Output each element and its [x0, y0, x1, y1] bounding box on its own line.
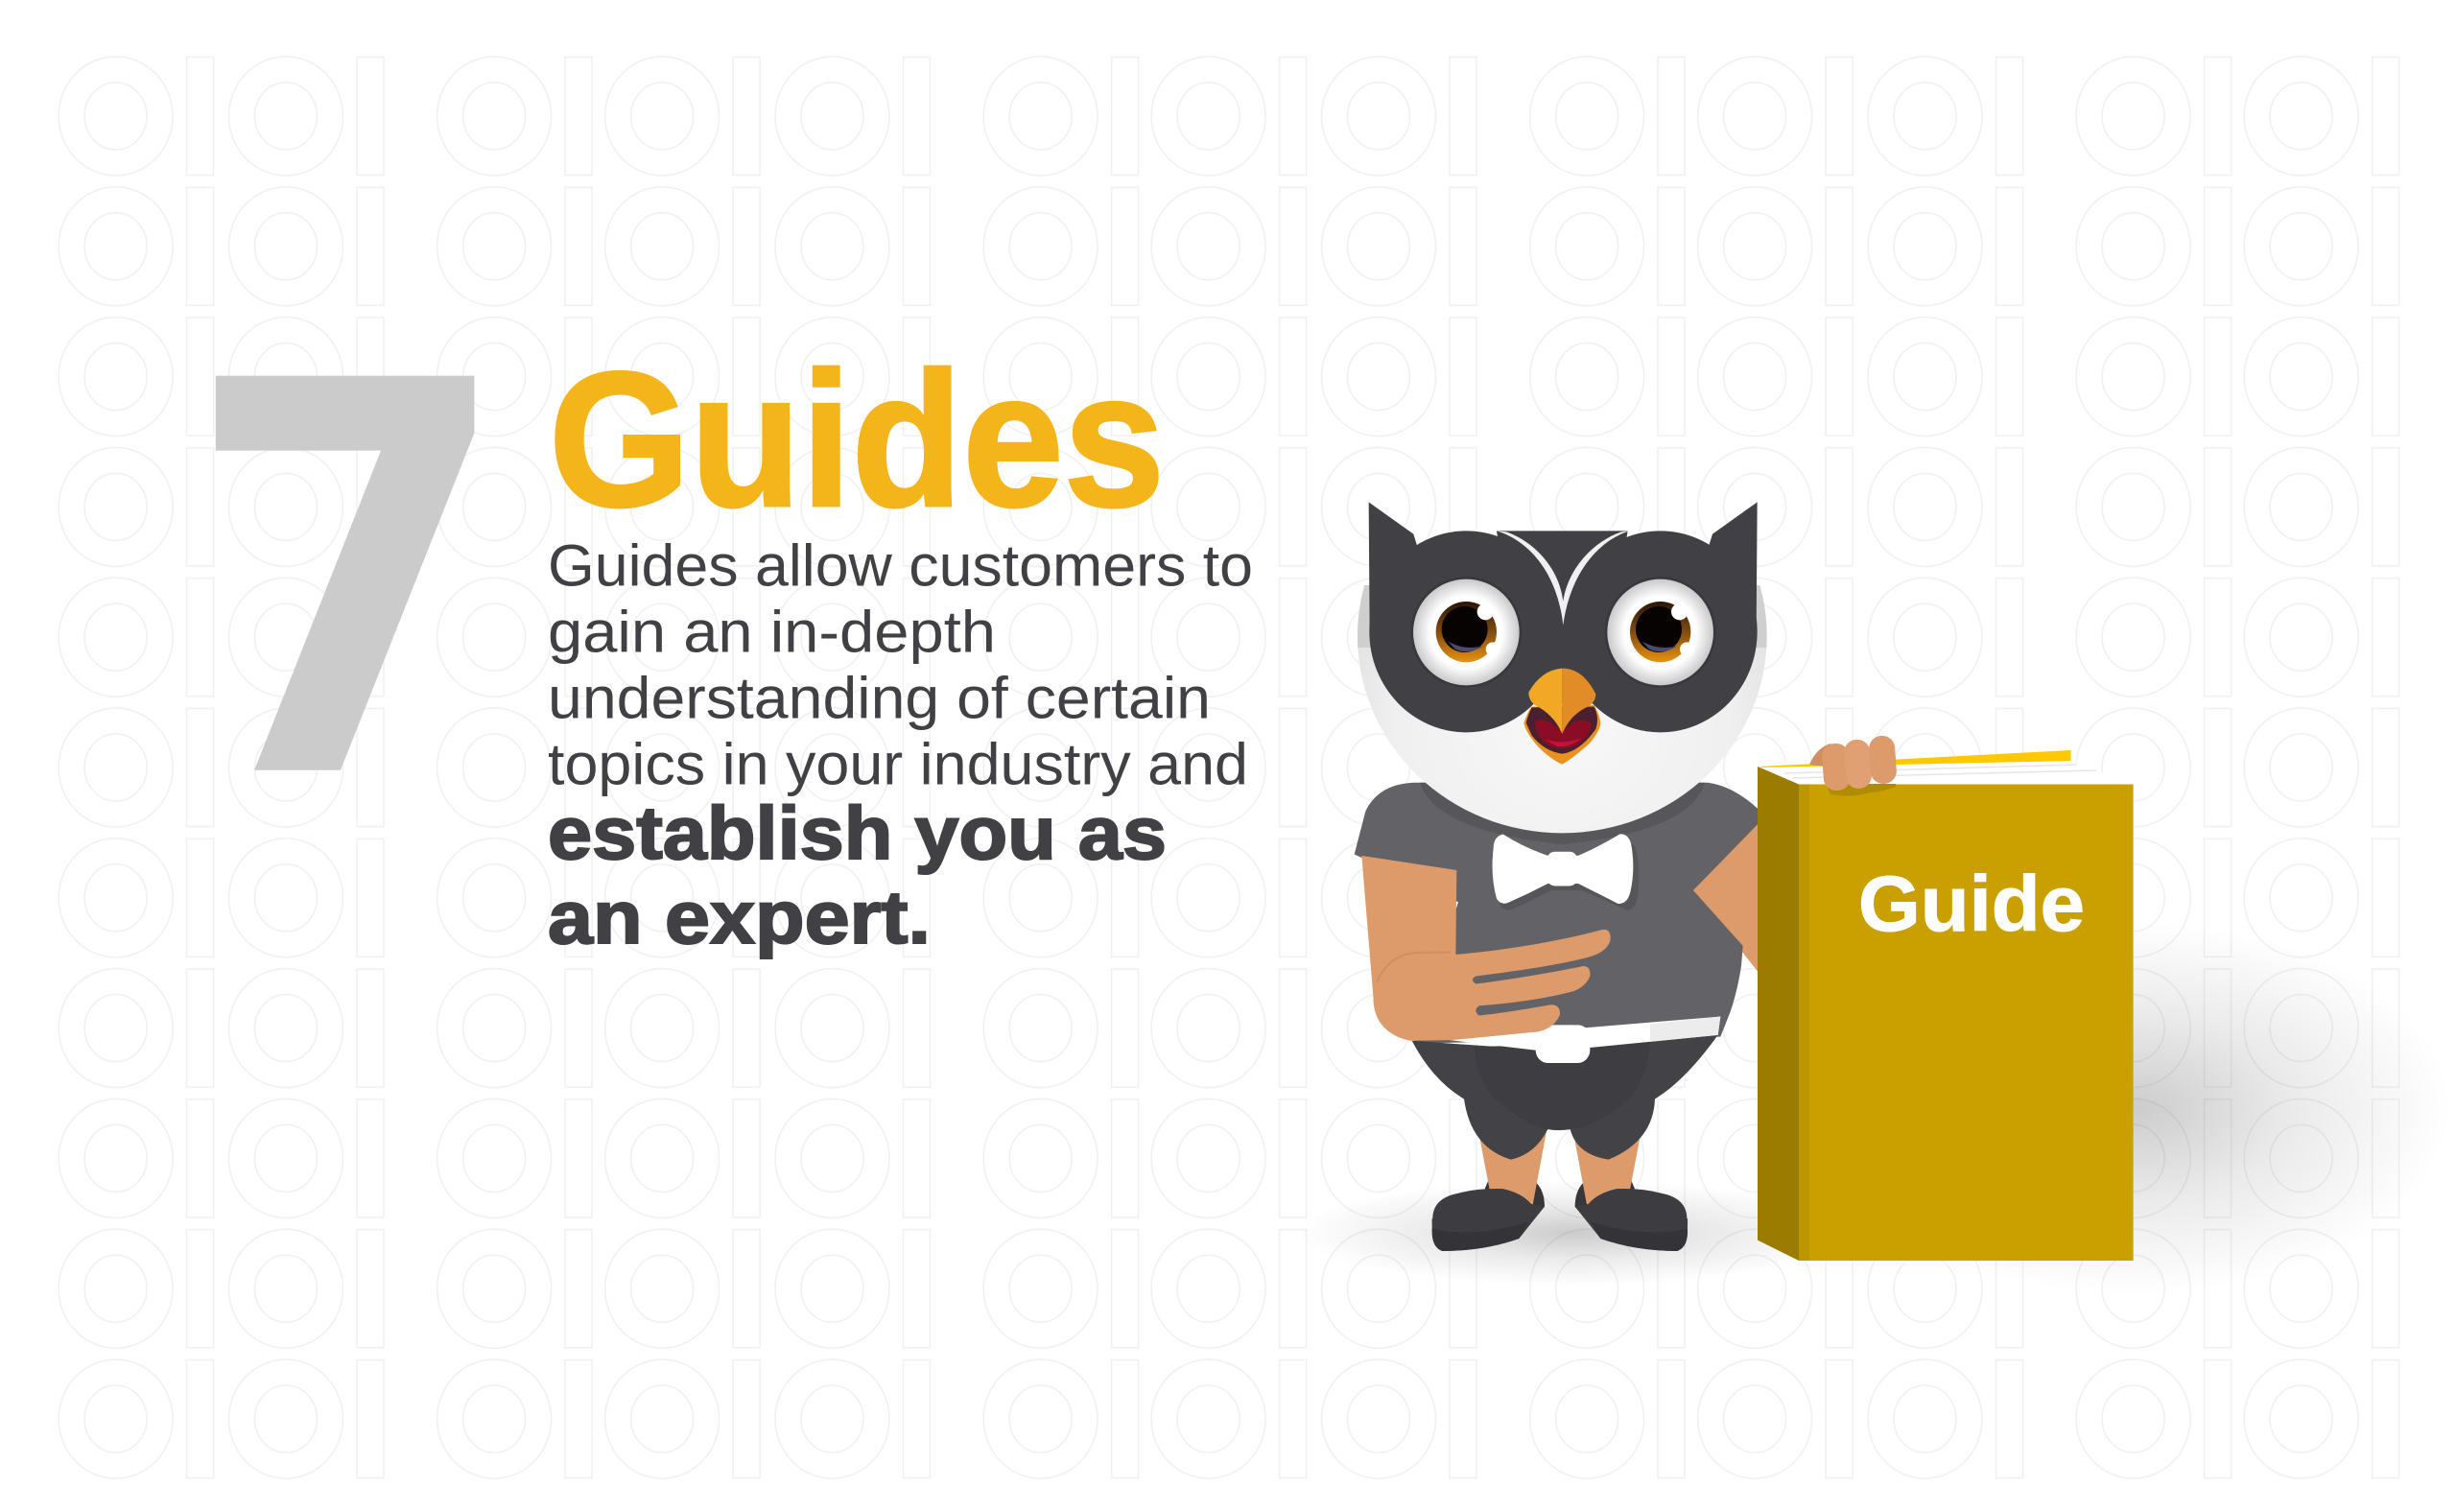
white brow lines	[1497, 531, 1629, 626]
book	[1758, 750, 2134, 1261]
body text: an expert.	[548, 875, 931, 959]
ground shadow under feet	[1295, 1180, 1852, 1286]
beak	[1523, 669, 1600, 765]
left shoe	[1432, 1189, 1545, 1251]
thumb	[1809, 744, 1836, 768]
book pages	[1759, 761, 2134, 785]
body text: Guides allow customers to	[548, 533, 1253, 599]
book title: Guide	[1858, 861, 2085, 948]
finger three	[1868, 735, 1898, 785]
face mask	[1369, 502, 1758, 732]
finger shadow on cover	[1826, 784, 1896, 796]
body text: establish you as	[548, 791, 1167, 875]
finger two	[1843, 739, 1873, 790]
right arm	[1693, 818, 1759, 973]
hand with fingers	[1374, 930, 1611, 1041]
belt buckle	[1536, 1025, 1590, 1063]
book front cover	[1809, 785, 2134, 1261]
head shape	[1358, 585, 1767, 833]
body text: understanding of certain	[548, 665, 1211, 730]
ground shadow behind book	[1818, 921, 2451, 1295]
body text	[548, 533, 1253, 959]
number seven: 7	[184, 268, 511, 898]
left eye	[1410, 577, 1522, 688]
yellow bookmark edge	[1759, 750, 2070, 782]
hand gripping book	[1809, 735, 1898, 796]
heading: Guides: Guides	[549, 333, 1165, 547]
bow tie shadow	[1497, 841, 1639, 910]
belt	[1436, 1017, 1720, 1051]
owl head	[1358, 502, 1767, 833]
right eye	[1605, 577, 1716, 688]
right shoe	[1575, 1189, 1688, 1251]
finger one	[1821, 743, 1852, 791]
shirt	[1355, 783, 1759, 1044]
shoe collars	[1485, 1180, 1635, 1222]
bow tie	[1493, 834, 1633, 904]
owl mascot body	[1355, 783, 1759, 1251]
book spine strip	[1799, 785, 1809, 1261]
left arm	[1361, 856, 1458, 1041]
shorts	[1412, 1035, 1718, 1160]
collar shadow	[1420, 783, 1705, 844]
body text: topics in your industry and	[548, 731, 1248, 796]
body text: gain an in-depth	[548, 599, 996, 664]
legs	[1479, 1124, 1641, 1210]
book spine side	[1758, 767, 1799, 1261]
